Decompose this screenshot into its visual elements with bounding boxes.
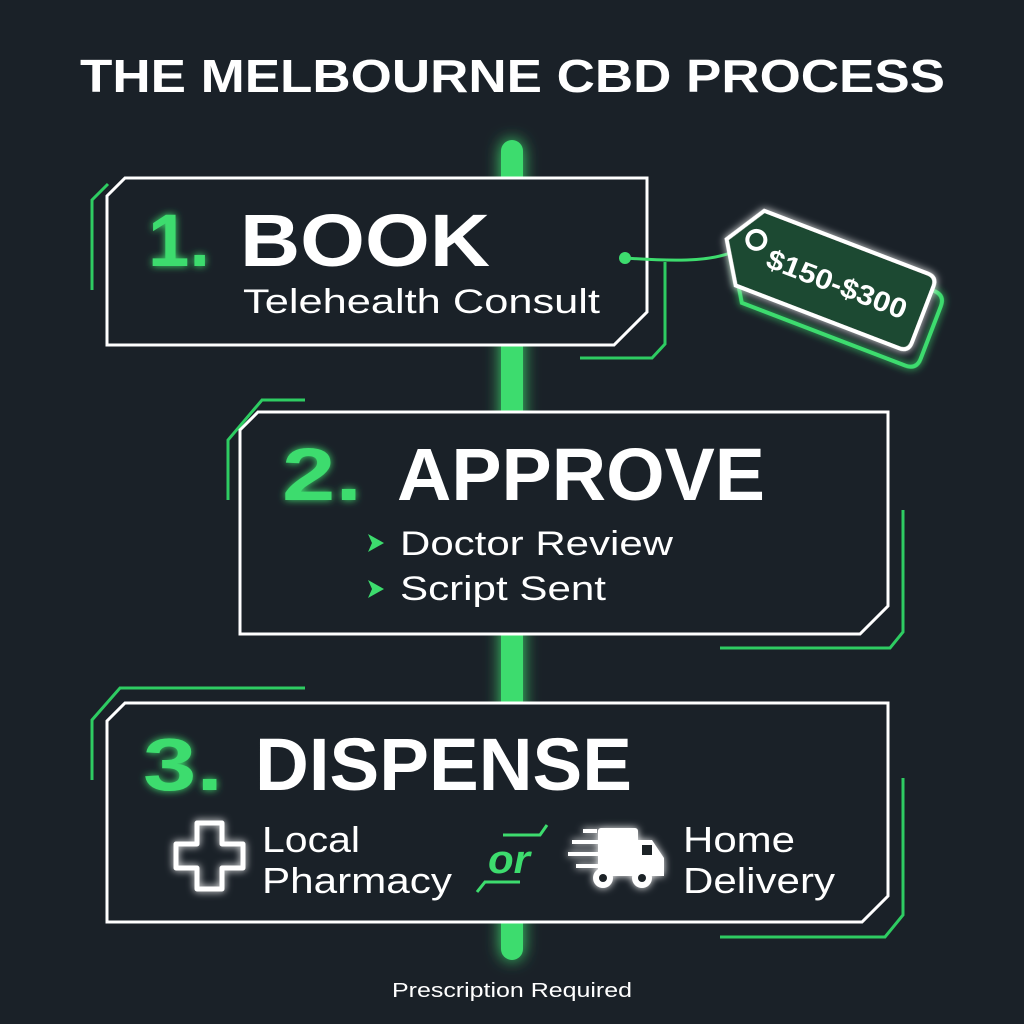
price tag: $150-$300 bbox=[762, 243, 911, 325]
step number 2: 2. bbox=[282, 433, 362, 516]
bullet list: Script Sent bbox=[400, 570, 607, 608]
text: local pharmacy: Pharmacy bbox=[262, 860, 452, 901]
step number 1: 1. bbox=[148, 199, 210, 282]
or divider: or bbox=[488, 838, 533, 882]
title: THE MELBOURNE CBD PROCESS bbox=[80, 50, 945, 102]
vertical timeline bar bbox=[501, 140, 523, 960]
panel: book bbox=[92, 178, 665, 358]
text: local pharmacy bbox=[262, 819, 452, 901]
text: home delivery: Delivery bbox=[683, 860, 835, 901]
text: home delivery: Home bbox=[683, 819, 795, 860]
subtext: Telehealth Consult bbox=[243, 283, 601, 321]
heading DISPENSE: DISPENSE bbox=[255, 723, 632, 806]
price tag bbox=[619, 202, 950, 370]
panel: dispense bbox=[92, 688, 903, 937]
panel: approve bbox=[228, 400, 903, 648]
heading BOOK: BOOK bbox=[240, 199, 490, 282]
bullet list bbox=[368, 525, 674, 608]
text: local pharmacy: Local bbox=[262, 819, 360, 860]
footer note: Prescription Required bbox=[392, 980, 632, 1002]
icon: pharmacy cross bbox=[176, 823, 243, 889]
heading APPROVE: APPROVE bbox=[397, 433, 765, 516]
text: home delivery bbox=[683, 819, 835, 901]
step number 3: 3. bbox=[143, 723, 223, 806]
bullet list: Doctor Review bbox=[400, 525, 674, 563]
or divider bbox=[477, 825, 547, 892]
icon: delivery truck bbox=[568, 828, 664, 888]
